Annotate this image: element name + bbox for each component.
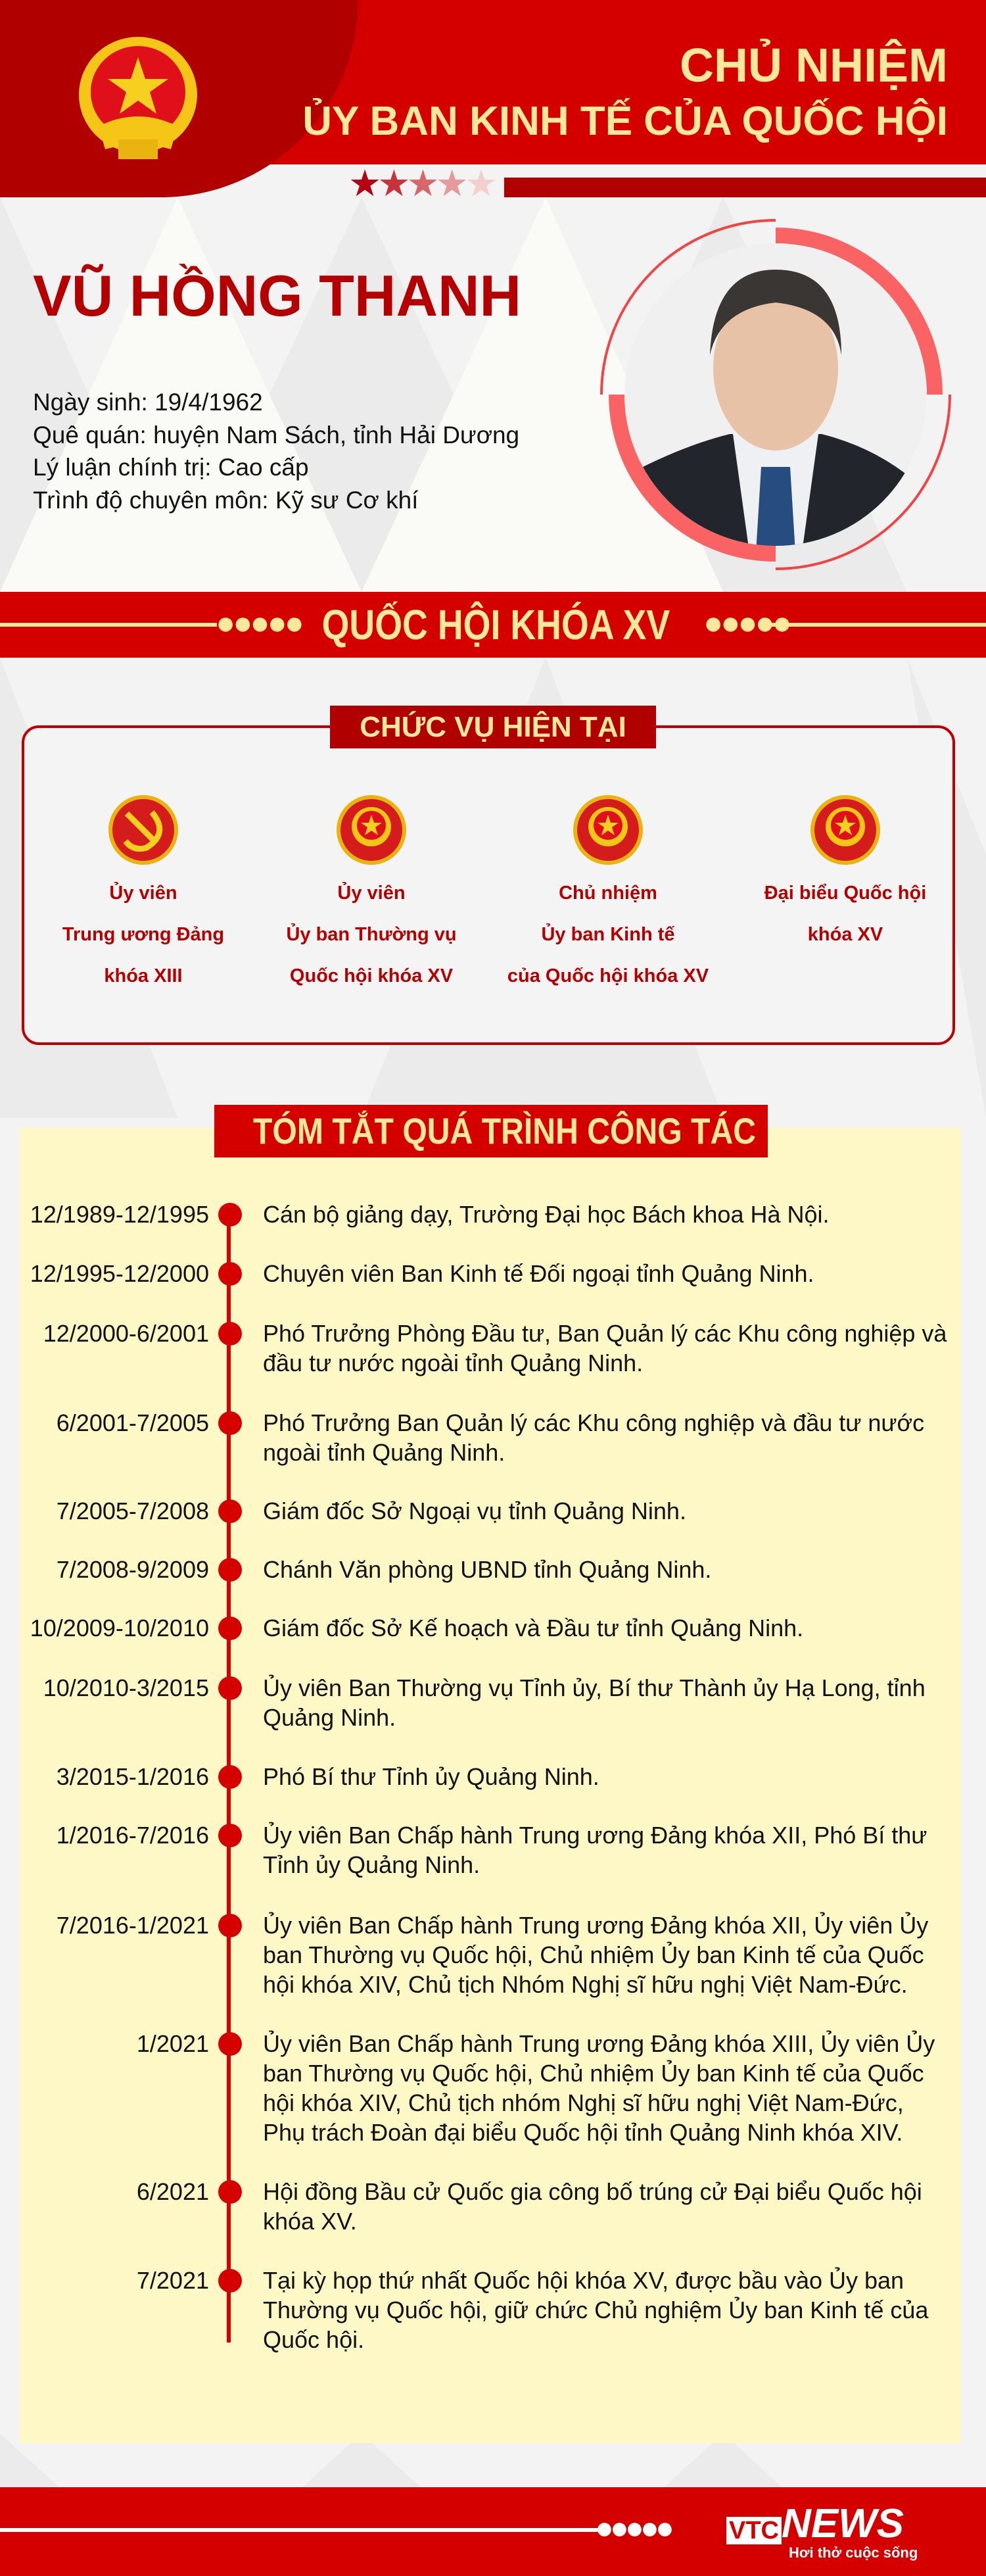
timeline entries: Phó Trưởng Ban Quản lý các Khu công nghiệp và đầu tư nước (263, 1409, 924, 1436)
panel: current positions (22, 725, 955, 1045)
icon: national emblem 3 (573, 795, 643, 865)
logo: VTC News: NEWS (782, 2501, 904, 2546)
entry 7 (30, 1615, 803, 1641)
timeline entries: hội khóa XIV, Chủ tịch Nhóm Nghị sĩ hữu nghị Việt Nam-Đức. (263, 1971, 908, 1998)
timeline entries: Hội đồng Bầu cử Quốc gia công bố trúng cử Đại biểu Quốc hội (263, 2178, 922, 2205)
name: VŨ HỒNG THANH (33, 263, 521, 328)
timeline entries: 12/1989-12/1995 (30, 1201, 209, 1228)
timeline entries: Quốc hội. (263, 2326, 364, 2353)
timeline entries: Tỉnh ủy Quảng Ninh. (263, 1851, 480, 1878)
position 1: Ủy viên (109, 883, 177, 904)
timeline entries: hội khóa XIV, Chủ tịch nhóm Nghị sĩ hữu nghị Việt Nam-Đức, (263, 2089, 904, 2116)
entry 3 (43, 1320, 947, 1376)
timeline entries: 12/2000-6/2001 (43, 1320, 209, 1347)
position 3: của Quốc hội khóa XV (507, 965, 709, 986)
timeline entries: 3/2015-1/2016 (57, 1763, 209, 1790)
entry 14 (137, 2267, 928, 2353)
header left dark shape (0, 0, 358, 197)
timeline entries: Chánh Văn phòng UBND tỉnh Quảng Ninh. (263, 1556, 711, 1583)
icon: national emblem 4 (810, 795, 880, 865)
timeline entries: Cán bộ giảng dạy, Trường Đại học Bách khoa Hà Nội. (263, 1201, 830, 1228)
section band: Quốc hội khóa XV: QUỐC HỘI KHÓA XV (322, 601, 670, 648)
timeline entries: Quảng Ninh. (263, 1704, 396, 1731)
timeline entries: 6/2001-7/2005 (57, 1409, 209, 1436)
section band: Quốc hội khóa XV: ●●●●● (703, 604, 789, 641)
entry 5 (57, 1497, 686, 1524)
timeline entries: 1/2016-7/2016 (57, 1822, 209, 1849)
timeline entries: đầu tư nước ngoài tỉnh Quảng Ninh. (263, 1349, 643, 1376)
entry 13 (137, 2178, 922, 2235)
footer (0, 2487, 986, 2576)
timeline entries: Ủy viên Ban Thường vụ Tỉnh ủy, Bí thư Thành ủy Hạ Long, tỉnh (263, 1674, 926, 1701)
position 3: Chủ nhiệm (559, 883, 657, 904)
position 1: khóa XIII (104, 965, 183, 986)
timeline entries: Tại kỳ họp thứ nhất Quốc hội khóa XV, được bầu vào Ủy ban (263, 2267, 904, 2294)
position 3: Ủy ban Kinh tế (541, 924, 674, 945)
timeline entries: Ủy viên Ban Chấp hành Trung ương Đảng khóa XII, Ủy viên Ủy (263, 1912, 928, 1939)
timeline entries: ban Thường vụ Quốc hội, Chủ nhiệm Ủy ban Kinh tế của Quốc (263, 1941, 924, 1968)
timeline entries: 1/2021 (137, 2030, 209, 2057)
entry 10 (57, 1822, 927, 1878)
timeline entries: Giám đốc Sở Kế hoạch và Đầu tư tỉnh Quảng Ninh. (263, 1615, 803, 1641)
header band (0, 0, 986, 164)
timeline entries: Phó Trưởng Phòng Đầu tư, Ban Quản lý các Khu công nghiệp và (263, 1320, 947, 1347)
logo: VTC News: VTC (729, 2517, 779, 2544)
position 2 (286, 882, 457, 986)
title: CHỦ NHIỆM (680, 39, 948, 92)
section band: Quốc hội khóa XV (0, 592, 986, 658)
heading: chức vụ hiện tại (330, 706, 656, 748)
position 4: Đại biểu Quốc hội (764, 883, 926, 904)
position 1: Trung ương Đảng (62, 924, 224, 945)
position 4: khóa XV (808, 924, 883, 945)
timeline entries: Ủy viên Ban Chấp hành Trung ương Đảng khóa XII, Phó Bí thư (263, 1822, 927, 1849)
timeline entries: Giám đốc Sở Ngoại vụ tỉnh Quảng Ninh. (263, 1497, 686, 1524)
heading: chức vụ hiện tại: CHỨC VỤ HIỆN TẠI (360, 711, 626, 743)
timeline entries: 7/2016-1/2021 (57, 1912, 209, 1939)
timeline axis (227, 1213, 231, 2343)
timeline entries: 10/2010-3/2015 (43, 1674, 209, 1701)
timeline entries: khóa XV. (263, 2208, 357, 2235)
position 2: Ủy viên (337, 883, 406, 904)
personal info (33, 389, 519, 513)
footer: ●●●●● (595, 2511, 670, 2546)
entry 2 (30, 1260, 814, 1287)
personal info: Quê quán: huyện Nam Sách, tỉnh Hải Dương (33, 421, 519, 449)
entry 1 (30, 1201, 830, 1228)
entry 11 (57, 1912, 928, 1998)
timeline entries (30, 1201, 947, 2353)
timeline entries: 7/2021 (137, 2267, 209, 2294)
entry 6 (57, 1556, 711, 1583)
portrait photo (600, 219, 951, 570)
timeline entries: 10/2009-10/2010 (30, 1615, 209, 1641)
icon: party emblem (108, 795, 178, 865)
panel: career timeline (20, 1128, 961, 2443)
heading: tóm tắt quá trình công tác: TÓM TẮT QUÁ TRÌNH CÔNG TÁC (253, 1110, 756, 1152)
timeline entries: Ủy viên Ban Chấp hành Trung ương Đảng khóa XIII, Ủy viên Ủy (263, 2030, 935, 2057)
personal info: Ngày sinh: 19/4/1962 (33, 389, 263, 416)
header bar (504, 178, 986, 197)
timeline entries: Thường vụ Quốc hội, giữ chức Chủ nghiệm Ủy ban Kinh tế của (263, 2297, 928, 2323)
position 2: Quốc hội khóa XV (290, 965, 453, 986)
timeline entries: 6/2021 (137, 2178, 209, 2205)
personal info: Trình độ chuyên môn: Kỹ sư Cơ khí (33, 487, 418, 513)
personal info: Lý luận chính trị: Cao cấp (33, 454, 309, 481)
timeline entries: ban Thường vụ Quốc hội, Chủ nhiệm Ủy ban Kinh tế của Quốc (263, 2060, 924, 2087)
position 2: Ủy ban Thường vụ (286, 924, 457, 945)
timeline entries: 12/1995-12/2000 (30, 1260, 209, 1287)
icon: national emblem 2 (337, 795, 406, 865)
position 3 (507, 883, 709, 986)
stars decoration: ★★★★★ (348, 162, 494, 204)
entry 9 (57, 1763, 599, 1790)
timeline entries: Phụ trách Đoàn đại biểu Quốc hội tỉnh Quảng Ninh khóa XIV. (263, 2119, 903, 2146)
entry 12 (137, 2030, 935, 2146)
timeline entries: ngoài tỉnh Quảng Ninh. (263, 1439, 505, 1466)
section band: Quốc hội khóa XV: ●●●●● (216, 604, 302, 641)
entry 4 (57, 1409, 924, 1466)
icon: national emblem (79, 37, 197, 159)
title (302, 38, 948, 144)
logo: VTC News (726, 2501, 918, 2561)
position 4 (764, 883, 926, 945)
timeline entries: 7/2008-9/2009 (57, 1556, 209, 1583)
entry 8 (43, 1674, 926, 1731)
title: ỦY BAN KINH TẾ CỦA QUỐC HỘI (302, 99, 948, 144)
timeline entries: 7/2005-7/2008 (57, 1497, 209, 1524)
logo: VTC News: Hơi thở cuộc sống (789, 2544, 918, 2561)
timeline entries: Phó Bí thư Tỉnh ủy Quảng Ninh. (263, 1763, 599, 1790)
position 1 (62, 882, 224, 986)
timeline entries: Chuyên viên Ban Kinh tế Đối ngoại tỉnh Quảng Ninh. (263, 1260, 814, 1287)
